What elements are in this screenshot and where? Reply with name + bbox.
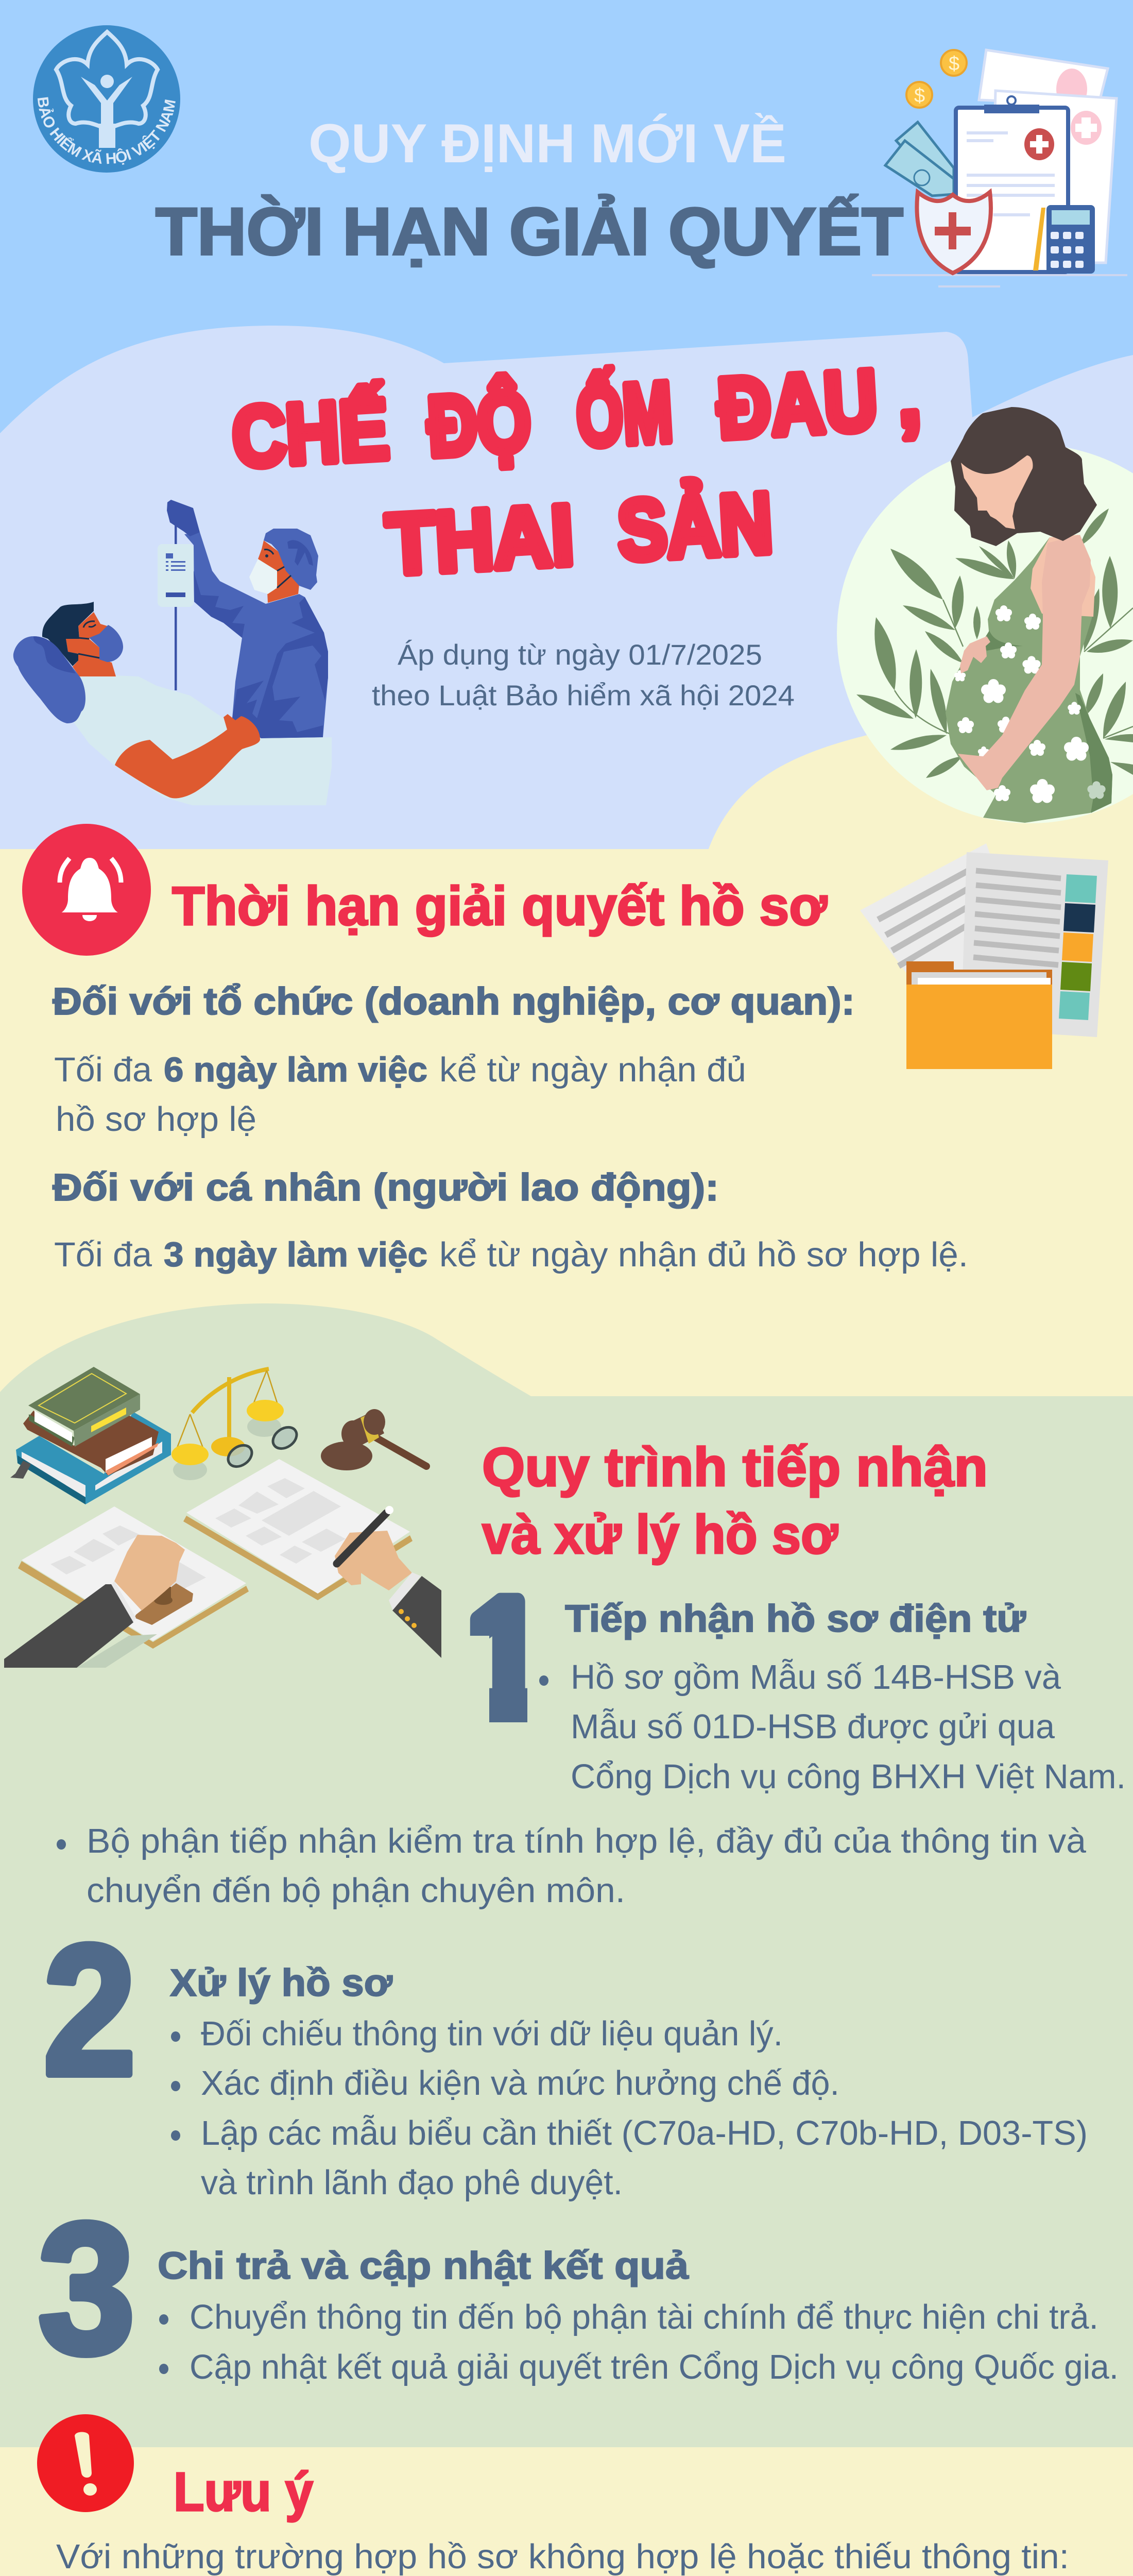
text: deadline for organisations: [53, 980, 855, 1139]
heading: Quy trình tiếp nhận và xử lý hồ sơ: Quy trình tiếp nhận: [482, 1437, 988, 1498]
background: cream note section: [0, 2447, 1133, 2576]
step 1 text: Tiếp nhận hồ sơ điện tử: [565, 1597, 1026, 1640]
text: reception check bullet: [57, 1822, 1086, 1910]
hero heading: Chế độ ốm đau, thai sản: ỐM: [574, 364, 675, 464]
background: green process section: [0, 1303, 1133, 2447]
glasses: [224, 1423, 301, 1471]
illustration: law books, scales, gavel and signing hands: [4, 1367, 441, 1668]
text: deadline for individuals: 3 ngày làm việc: [164, 1236, 427, 1274]
icon: medical documents, money, shield and calculator: [872, 50, 1127, 286]
text: deadline for organisations: 6 ngày làm việc: [164, 1051, 427, 1089]
step 1 text: Cổng Dịch vụ công BHXH Việt Nam.: [571, 1758, 1126, 1796]
text: reception check bullet: Bộ phận tiếp nhận kiểm tra tính hợp lệ, đầy đủ của thông tin và: [87, 1822, 1086, 1860]
step 1 text: Hồ sơ gồm Mẫu số 14B-HSB và: [571, 1658, 1061, 1697]
text: reception check bullet: chuyển đến bộ phận chuyên môn.: [87, 1872, 625, 1910]
logo: Bảo hiểm xã hội Việt Nam: BẢO HIỂM XÃ HỘI VIỆT NAM: [37, 97, 176, 165]
illustration: file folder with documents: [860, 843, 1108, 1069]
heading: Quy trình tiếp nhận và xử lý hồ sơ: [482, 1437, 988, 1565]
blue book: [10, 1412, 171, 1504]
heading: Quy trình tiếp nhận và xử lý hồ sơ: và xử lý hồ sơ: [482, 1504, 838, 1565]
icon: medical documents, money, shield and calculator: $: [949, 53, 959, 75]
green law book: [28, 1367, 140, 1447]
text: deadline for individuals: [53, 1166, 968, 1274]
hero heading: Chế độ ốm đau, thai sản: ,: [895, 348, 923, 444]
icon: medical documents, money, shield and calculator: $: [914, 85, 925, 107]
title line 2: THỜI HẠN GIẢI QUYẾT: [156, 194, 903, 269]
subtitle: effective date and law: Áp dụng từ ngày 01/7/2025: [398, 638, 762, 671]
step 2 text: và trình lãnh đạo phê duyệt.: [201, 2164, 623, 2202]
logo: Bảo hiểm xã hội Việt Nam: [33, 25, 180, 173]
background: cream deadline section: [0, 849, 1133, 1400]
step 3 number: 3: [38, 2185, 135, 2392]
text: deadline for individuals: kể từ ngày nhận đủ hồ sơ hợp lệ.: [439, 1236, 968, 1274]
text: deadline for individuals: Đối với cá nhân (người lao động):: [53, 1166, 719, 1209]
title line 1: QUY ĐỊNH MỚI VỀ: [308, 112, 786, 174]
step 2 text: [170, 1961, 1088, 2202]
text: deadline for organisations: Đối với tổ chức (doanh nghiệp, cơ quan):: [53, 980, 855, 1023]
step 2 text: Lập các mẫu biểu cần thiết (C70a-HD, C70b-HD, D03-TS): [201, 2114, 1088, 2153]
illustration: doctor with patient: [13, 500, 332, 805]
step 3 text: Chi trả và cập nhật kết quả: [158, 2244, 689, 2287]
step 1 text: Mẫu số 01D-HSB được gửi qua: [571, 1708, 1055, 1746]
illustration: pregnant woman with leaves: [837, 407, 1133, 823]
step 2 number: 2: [43, 1907, 136, 2114]
background: cream hill under the pregnant woman: [708, 721, 1133, 850]
step 3 text: Chuyển thông tin đến bộ phận tài chính để thực hiện chi trả.: [190, 2298, 1098, 2336]
text: deadline for organisations: Tối đa: [54, 1051, 152, 1089]
hero heading: Chế độ ốm đau, thai sản: ĐAU: [715, 352, 880, 456]
stamp and left hand: [4, 1535, 193, 1668]
hero heading: Chế độ ốm đau, thai sản: ĐỘ: [425, 374, 534, 474]
text: note body: Với những trường hợp hồ sơ không hợp lệ hoặc thiếu thông tin:: [56, 2538, 1069, 2576]
text: deadline for organisations: kể từ ngày nhận đủ: [439, 1051, 746, 1089]
text: deadline for individuals: Tối đa: [54, 1236, 152, 1274]
hero heading: Chế độ ốm đau, thai sản: SẢN: [615, 475, 775, 578]
icon: red bell badge: [22, 824, 151, 956]
left document: [18, 1506, 249, 1649]
subtitle: effective date and law: theo Luật Bảo hiểm xã hội 2024: [372, 679, 795, 711]
background: header blue: [0, 0, 1133, 515]
icon: red exclamation badge: [37, 2414, 134, 2512]
step 1 number: 1: [468, 1566, 543, 1748]
brown book: [23, 1411, 159, 1476]
hero heading: Chế độ ốm đau, thai sản: CHẾ: [230, 381, 391, 485]
step 3 text: [158, 2244, 1119, 2386]
hero heading: Chế độ ốm đau, thai sản: THAI: [384, 487, 576, 592]
decorative leaves: [856, 509, 1133, 778]
gavel: [321, 1409, 426, 1470]
step 2 text: Đối chiếu thông tin với dữ liệu quản lý.: [201, 2015, 783, 2053]
background: lilac hero panel: [0, 326, 1133, 850]
subtitle: effective date and law: [372, 638, 795, 711]
right document: [183, 1459, 413, 1600]
scales of justice: [171, 1369, 284, 1480]
heading: Lưu ý: Lưu ý: [174, 2462, 313, 2522]
hero heading: Chế độ ốm đau, thai sản: [230, 348, 923, 592]
text: deadline for organisations: hồ sơ hợp lệ: [56, 1100, 256, 1139]
heading: Thời hạn giải quyết hồ sơ: Thời hạn giải quyết hồ sơ: [172, 876, 828, 937]
step 1 text: [539, 1597, 1126, 1796]
step 3 text: Cập nhật kết quả giải quyết trên Cổng Dịch vụ công Quốc gia.: [190, 2348, 1119, 2386]
step 2 text: Xác định điều kiện và mức hưởng chế độ.: [201, 2064, 839, 2103]
step 2 text: Xử lý hồ sơ: [170, 1961, 392, 2004]
pen and right hand: [335, 1506, 441, 1658]
